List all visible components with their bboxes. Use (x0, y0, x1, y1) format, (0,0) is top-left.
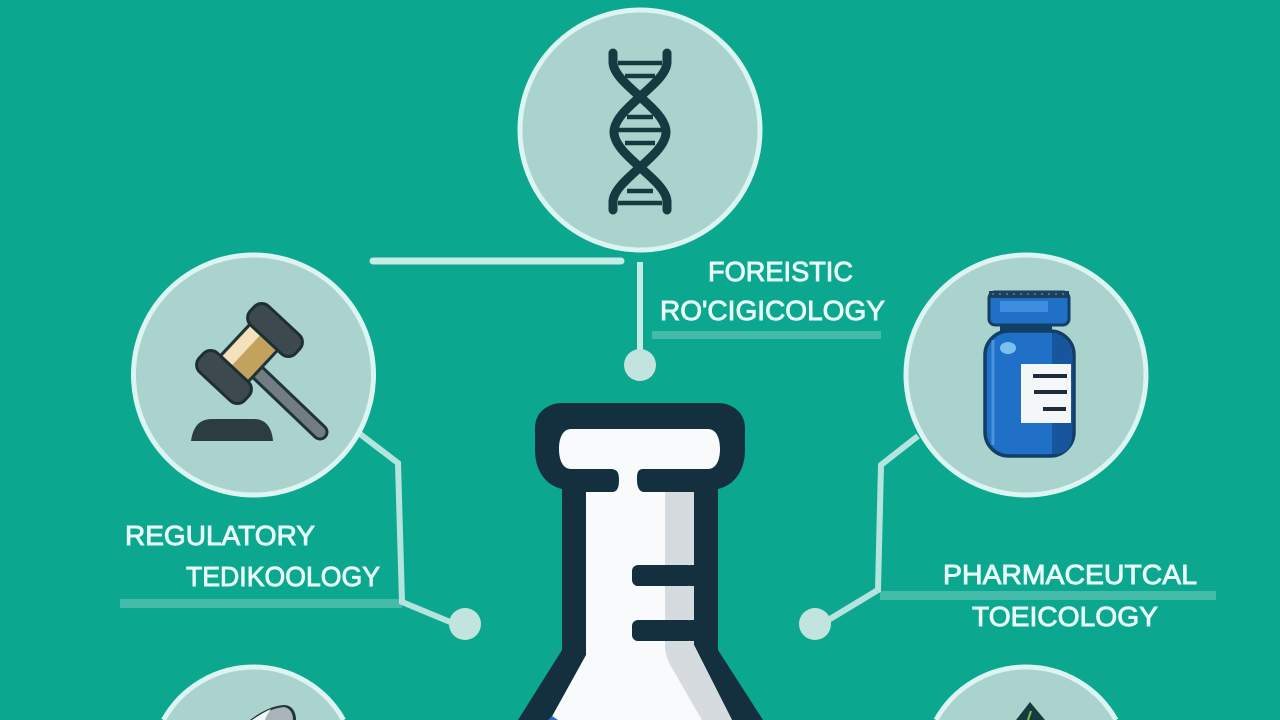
label: forensic: FOREISTIC (708, 256, 853, 287)
circle: DNA (520, 10, 760, 250)
connector: regulatory branch (120, 434, 481, 640)
label: regulatory: TEDIKOOLOGY (186, 561, 380, 592)
label: pharmaceutical: TOEICOLOGY (972, 601, 1158, 632)
label: regulatory: REGULATORY (125, 520, 315, 551)
connector: pharmaceutical branch (799, 436, 1216, 640)
label: regulatory (125, 520, 380, 592)
icon: pill bottle (985, 291, 1074, 456)
circle: lower-right partial (936, 667, 1116, 720)
icon: lower-right leaf tip (1016, 702, 1045, 720)
label: pharmaceutical (943, 559, 1197, 632)
circle: pharmaceutical bottle (906, 255, 1146, 495)
label: pharmaceutical: PHARMACEUTCAL (943, 559, 1197, 590)
connector: forensic branch (373, 261, 881, 381)
circle: lower-left partial (163, 667, 344, 720)
icon: DNA helix (613, 53, 667, 210)
circle: regulatory gavel (134, 255, 374, 495)
label: forensic (660, 256, 885, 326)
icon: lower-left silver tip (250, 705, 296, 720)
label: forensic: RO'CIGICOLOGY (660, 295, 885, 326)
icon: gavel (191, 299, 320, 441)
central flask (518, 403, 763, 720)
